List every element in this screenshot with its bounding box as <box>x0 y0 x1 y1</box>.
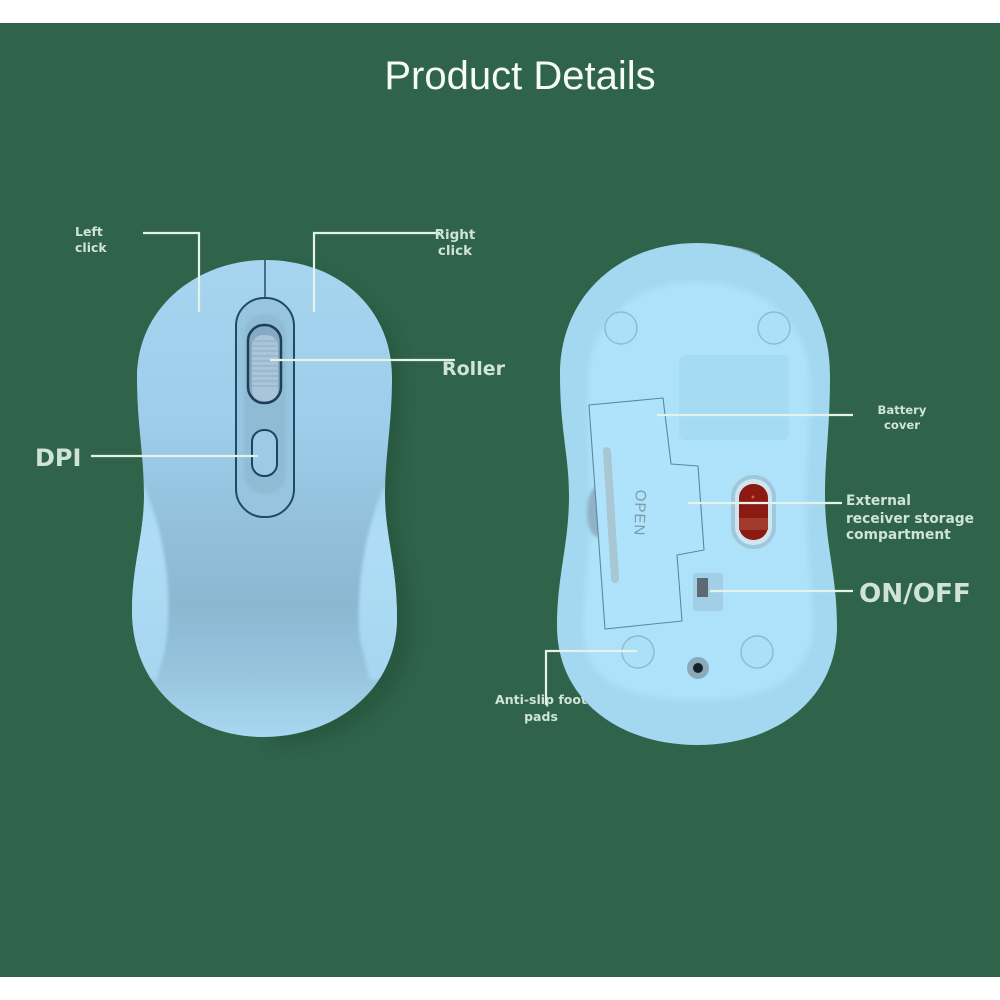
leader: foot pad <box>546 651 637 705</box>
button split line <box>264 260 266 298</box>
title: Product Details <box>384 54 656 98</box>
battery cover <box>589 398 704 629</box>
label: External receiver storage compartment: External <box>846 493 911 509</box>
label: Right click <box>314 227 476 312</box>
inner base plate <box>584 282 813 700</box>
label: Battery cover: Battery <box>878 403 927 417</box>
side grips <box>120 460 405 680</box>
mouse shadow <box>273 270 412 745</box>
DPI button <box>252 430 277 476</box>
label text: Anti-slip foot pads <box>495 692 587 724</box>
foot pad bottom right <box>741 636 773 668</box>
control strip <box>236 298 294 517</box>
label plate <box>679 355 789 440</box>
label: External receiver storage compartment <box>688 493 974 543</box>
top edge sliver <box>640 245 760 256</box>
label: Roller: Roller <box>442 358 506 380</box>
foot pad top left <box>605 312 637 344</box>
foot pad top right <box>758 312 790 344</box>
label: Left click: click <box>75 240 107 255</box>
roller recess <box>244 314 286 494</box>
label: Right click: click <box>438 243 473 259</box>
OPEN mark: OPEN <box>630 489 649 537</box>
cover grip slot <box>607 451 615 579</box>
label: Battery cover <box>657 403 927 432</box>
mouse top view <box>120 260 412 745</box>
optical sensor <box>731 475 776 549</box>
mouse body <box>132 260 397 737</box>
charging hole <box>687 657 709 679</box>
label text: Anti-slip foot pads: pads <box>524 709 558 724</box>
foot pad bottom left <box>622 636 654 668</box>
wheel bump <box>587 487 607 537</box>
label: DPI: DPI <box>35 444 81 472</box>
power switch <box>693 573 723 611</box>
mouse body underside <box>557 243 837 745</box>
label: Right click: Right <box>435 227 476 243</box>
scroll wheel <box>248 325 281 403</box>
label: Left click: Left <box>75 224 103 239</box>
label: Battery cover: cover <box>884 418 920 432</box>
mouse bottom view <box>557 243 837 745</box>
label: External receiver storage compartment: compartment <box>846 527 951 543</box>
label text: Anti-slip foot pads: Anti-slip foot <box>495 692 587 707</box>
label: External receiver storage compartment: receiver storage <box>846 511 974 527</box>
label: ON/OFF: ON/OFF <box>859 579 971 609</box>
label: Left click <box>75 224 199 312</box>
